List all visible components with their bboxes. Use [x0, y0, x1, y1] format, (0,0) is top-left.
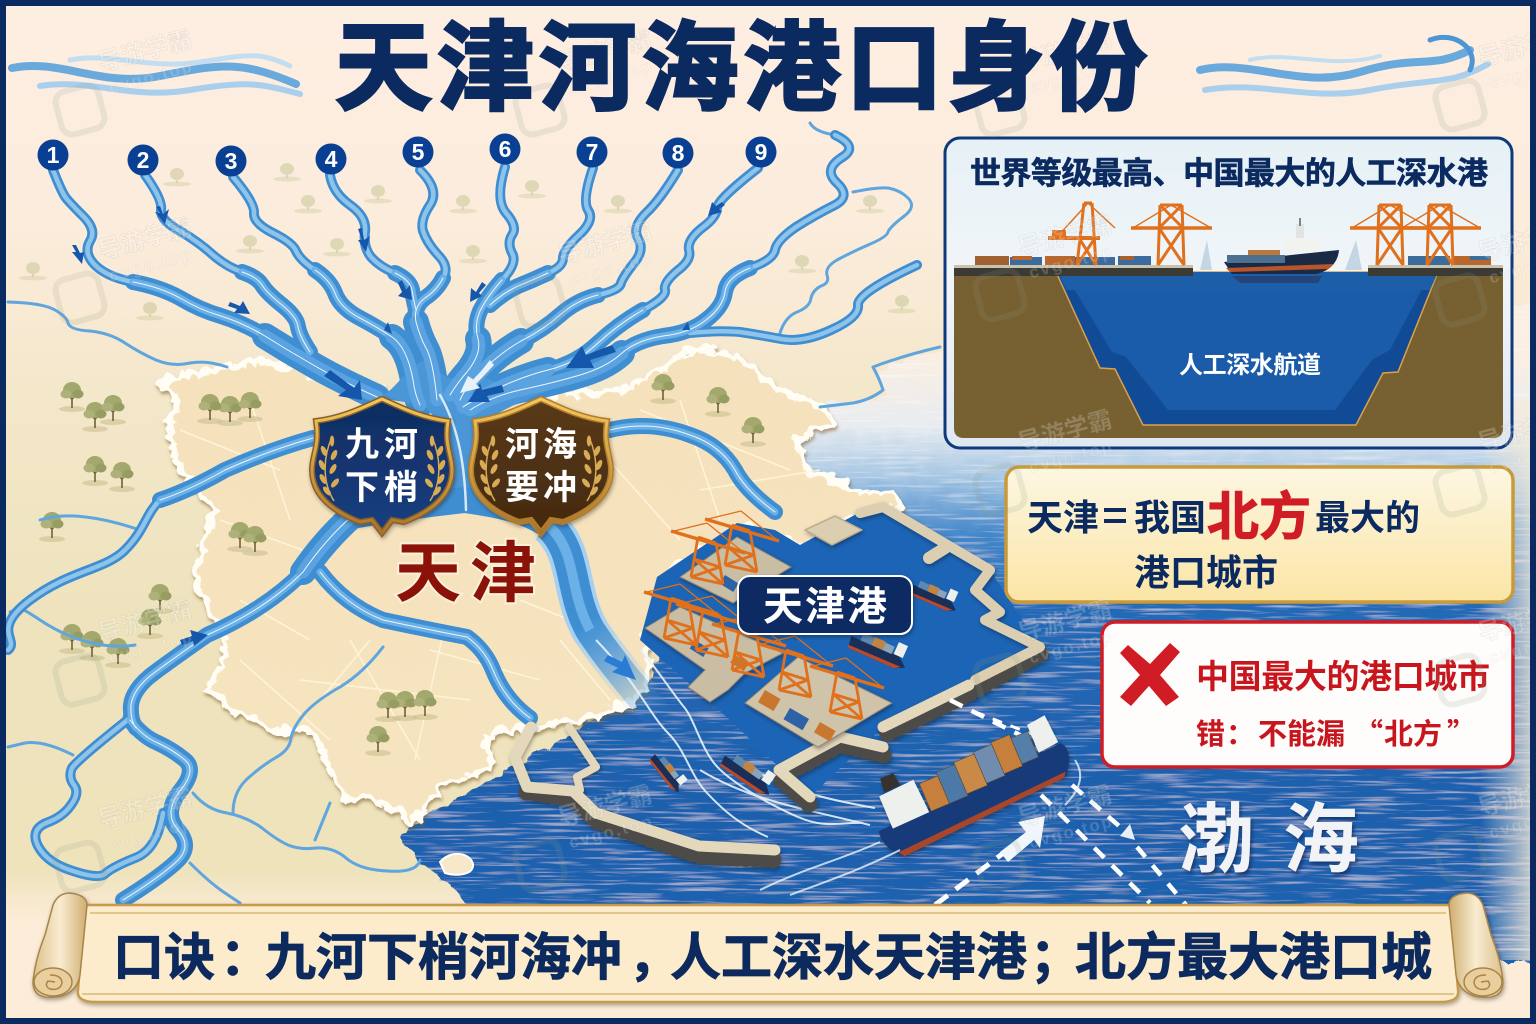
decorative waves: right of title	[1200, 37, 1488, 94]
panel ship	[1224, 218, 1339, 283]
shield: 河海要冲	[471, 399, 611, 533]
west breakwater	[515, 727, 775, 860]
panel: wrong statement: 错	[1196, 711, 1225, 753]
shield: 河海要冲: 海	[543, 426, 577, 464]
quay cranes	[1048, 203, 1481, 265]
faint trees on the outer plain	[19, 163, 916, 320]
river number markers: 3	[225, 148, 237, 174]
east breakwater	[779, 507, 1040, 805]
containers on quays	[975, 256, 1491, 265]
panel: wrong statement: ：	[1226, 711, 1255, 753]
harbour basin	[640, 507, 1040, 797]
river to sea	[548, 525, 665, 725]
river number markers: 1	[47, 142, 60, 168]
panel: northern largest port city: 最大的	[1315, 499, 1420, 538]
river number markers: 8	[672, 140, 685, 166]
port piers	[645, 537, 892, 747]
city label: 天津: 天津	[395, 536, 536, 610]
scroll roll: left	[33, 893, 87, 997]
river number markers: 7	[586, 139, 598, 165]
port cranes	[644, 511, 884, 719]
shield: 九河下梢	[312, 399, 452, 533]
panel: northern largest port city: 我国	[1134, 497, 1206, 538]
sea fade at right edge	[1480, 400, 1536, 960]
deep water channel	[1056, 272, 1438, 425]
port label: 天津港	[738, 576, 912, 634]
sea: Bohai	[397, 300, 1536, 960]
panel: wrong statement: 中国最大的港口城市	[1196, 658, 1490, 695]
mnemonic text: ，	[628, 929, 679, 986]
panel heading: 世界等级最高、中国最大的人工深水港	[970, 156, 1488, 191]
river number markers: 2	[137, 147, 149, 173]
panel: northern largest port city	[1006, 467, 1513, 602]
panel: deep water port	[945, 138, 1512, 448]
panel: northern largest port city: 天津	[1027, 497, 1099, 538]
panel: wrong statement: ”	[1447, 711, 1476, 753]
bottom scroll banner	[33, 893, 1503, 1002]
soil cross-section	[954, 276, 1503, 438]
river number markers	[38, 134, 776, 176]
mnemonic text: 九河下梢河海冲	[265, 929, 622, 986]
icon: red cross	[1120, 643, 1180, 706]
decorative waves: left of title	[12, 56, 300, 94]
scroll roll: right	[1449, 893, 1503, 997]
river number markers: 9	[755, 139, 767, 165]
shield: 九河下梢: 下	[345, 469, 379, 507]
flow arrows on rivers	[72, 202, 725, 680]
distant city towers	[1200, 240, 1362, 270]
deep water channel: 人工深水航道	[1179, 352, 1321, 379]
panel: wrong statement: 北方	[1384, 711, 1442, 753]
shield: 九河下梢: 九	[345, 426, 379, 464]
sea label: 渤海: 渤海	[1178, 798, 1359, 883]
trunk fork under the shields	[352, 500, 465, 516]
confluence of rivers	[378, 358, 570, 512]
ship wake	[760, 760, 1080, 895]
river number markers: 6	[499, 136, 511, 162]
panel: northern largest port city: 港口城市	[1134, 552, 1278, 593]
port containers	[690, 575, 836, 741]
river number markers: 4	[325, 146, 338, 172]
panel: wrong statement: “	[1354, 711, 1383, 753]
panel: wrong statement	[1102, 622, 1513, 767]
title: 天津河海港口身份	[335, 14, 1147, 123]
quays	[954, 265, 1503, 276]
shield: 九河下梢: 梢	[384, 469, 418, 507]
nine rivers converging	[8, 123, 940, 903]
mnemonic text: 口诀	[113, 929, 215, 986]
panel: wrong statement: 不能漏	[1258, 711, 1345, 753]
shield: 河海要冲: 冲	[543, 469, 577, 507]
shield: 河海要冲: 河	[505, 426, 539, 464]
shield: 九河下梢: 河	[384, 426, 418, 464]
panel: northern largest port city: 北方	[1207, 489, 1311, 547]
main container ship	[860, 707, 1081, 862]
shield: 河海要冲: 要	[505, 469, 539, 507]
shipping route dashes and arrow	[935, 700, 1186, 905]
island	[440, 854, 473, 875]
white flow arrow	[460, 360, 494, 393]
mnemonic text: ：	[220, 929, 271, 986]
trees in Tianjin	[197, 374, 766, 756]
equals sign	[1104, 508, 1126, 523]
port label: 天津港: 天津港	[763, 585, 887, 629]
mnemonic text: ；	[1030, 929, 1081, 986]
trees on the outer plain	[39, 382, 173, 668]
mnemonic text: 北方最大港口城	[1075, 929, 1432, 986]
river number markers: 5	[412, 139, 425, 165]
Tianjin territory	[157, 345, 895, 820]
road network in Tianjin	[180, 400, 820, 760]
mnemonic text: 人工深水天津港	[670, 929, 1027, 986]
sea current streaks	[596, 640, 875, 837]
small ships	[648, 573, 963, 799]
